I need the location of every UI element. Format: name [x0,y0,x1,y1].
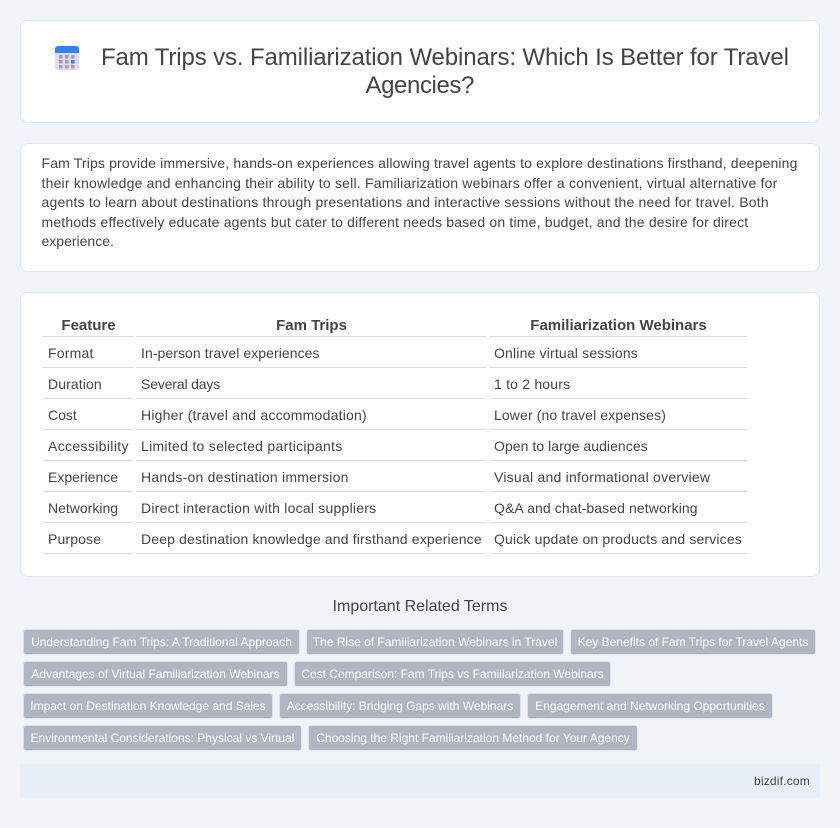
table row: Format [48,345,638,361]
text block: summary: experience. [42,233,114,249]
tag [23,693,273,719]
tag [306,629,564,655]
table row: Cost: Higher (travel and accommodation) [141,407,367,423]
tag [23,661,288,687]
table row: Purpose: Quick update on products and services [494,531,742,547]
text block: summary: methods effectively educate agents but cater to different needs based on time, budget, and the desire for direct [42,214,748,230]
table row: Networking: Q&A and chat-based networking [494,500,698,516]
tag [279,693,521,719]
text block: summary: agents to learn about destinations through presentations and interactive sessions without the need for travel. Both [42,194,769,210]
tag: Impact on Destination Knowledge and Sales [30,699,266,713]
tag: Choosing the Right Familiarization Method for Your Agency [316,731,630,745]
panel: comparison table [20,292,820,577]
table row: Duration: Several days [141,376,220,392]
table row: Purpose: Purpose [48,531,101,547]
table row: Purpose: Deep destination knowledge and firsthand experience [141,531,482,547]
tag [308,725,638,751]
table row: Format: Format [48,345,94,361]
table row: Cost [48,407,666,423]
icon: calendar [55,46,79,70]
table header [61,317,707,334]
tag [23,629,300,655]
table header: Fam Trips [276,317,347,334]
text block: summary [42,155,798,249]
table header: Feature [61,317,116,334]
heading: title: Fam Trips vs. Familiarization Webinars: Which Is Better for Travel [101,44,789,71]
tag: Understanding Fam Trips: A Traditional Approach [31,635,292,649]
table row: Accessibility: Open to large audiences [494,438,648,454]
tag: Cost Comparison: Fam Trips vs Familiarization Webinars [301,667,604,681]
table row: Networking: Networking [48,500,118,516]
table row: Duration: 1 to 2 hours [494,376,570,392]
tag [294,661,611,687]
text block: summary: Fam Trips provide immersive, hands-on experiences allowing travel agents to explore destinations firsthand, deepening [42,155,798,171]
tag list: related terms [23,629,816,751]
table header: Familiarization Webinars [530,317,707,334]
table row: Accessibility [48,438,648,454]
table row: Cost: Lower (no travel expenses) [494,407,666,423]
tag: The Rise of Familiarization Webinars in Travel [313,635,557,649]
heading: related terms: Important Related Terms [333,598,507,615]
text block: summary: their knowledge and enhancing their ability to sell. Familiarization webinars offer a convenient, virtual alternative for [42,174,778,190]
tag: Engagement and Networking Opportunities [535,699,765,713]
table row: Experience [48,469,710,485]
panel: summary [20,143,820,272]
table row: Duration: Duration [48,376,102,392]
tag [23,725,302,751]
table row: Format: Online virtual sessions [494,345,638,361]
tag: Environmental Considerations: Physical vs Virtual [31,731,294,745]
table rules [43,336,747,554]
tag [527,693,773,719]
table row: Experience: Hands-on destination immersion [141,469,349,485]
table row: Cost: Cost [48,407,77,423]
table row: Networking [48,500,698,516]
tag: Accessibility: Bridging Gaps with Webinars [287,699,513,713]
table row: Experience: Experience [48,469,118,485]
table row: Accessibility: Accessibility [48,438,129,454]
table row: Networking: Direct interaction with local suppliers [141,500,376,516]
panel: title [20,20,820,123]
table row: Experience: Visual and informational overview [494,469,710,485]
tag [570,629,816,655]
footer credit: bizdif.com [754,774,810,788]
table row: Duration [48,376,570,392]
footer [20,764,820,798]
table row: Format: In-person travel experiences [141,345,320,361]
table row: Accessibility: Limited to selected participants [141,438,342,454]
heading: title: Agencies? [366,72,474,99]
table row: Purpose [48,531,742,547]
tag: Key Benefits of Fam Trips for Travel Agents [578,635,808,649]
heading: title [101,44,789,99]
tag: Advantages of Virtual Familiarization Webinars [31,667,280,681]
